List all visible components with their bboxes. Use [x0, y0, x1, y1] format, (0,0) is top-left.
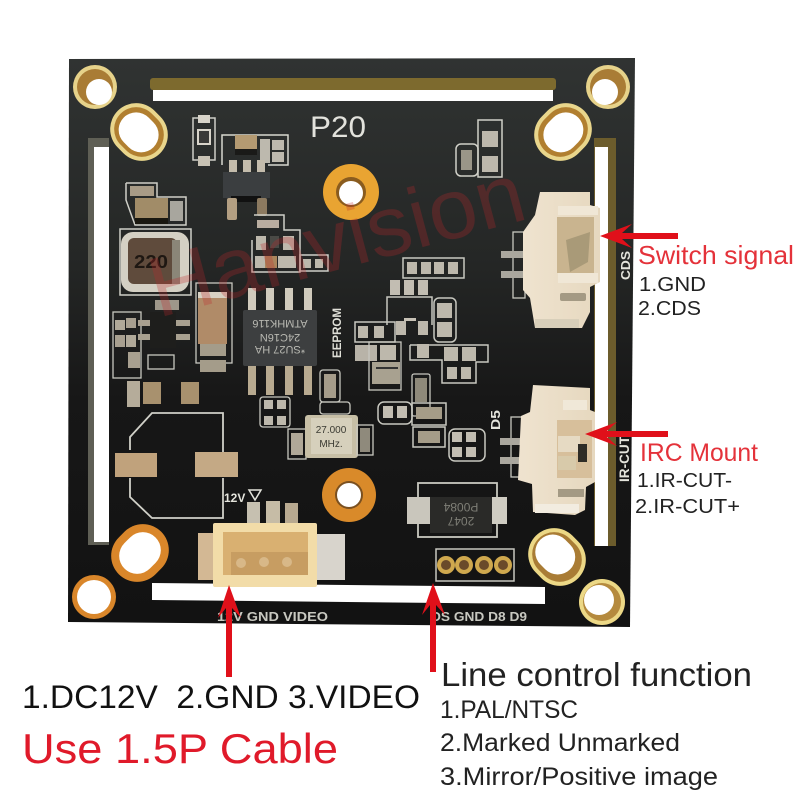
- IRC mount pins: 2.IR-CUT+: [635, 496, 740, 518]
- top slot: [150, 78, 556, 101]
- IRC mount pins: 1.IR-CUT-: [637, 470, 732, 492]
- EEPROM chip: [243, 288, 317, 395]
- chip markings: ATMHK116: [252, 317, 308, 329]
- circuit board: [68, 58, 635, 627]
- line control options: 3.Mirror/Positive image: [440, 763, 718, 791]
- label: switch signal: Switch signal: [638, 240, 794, 270]
- SMD group below chip: [260, 370, 340, 459]
- silkscreen: 12V and pin marker: [224, 490, 261, 505]
- label: line control function: Line control function: [441, 656, 752, 693]
- SMD group upper middle: [252, 215, 328, 272]
- label: IRC mount: [635, 439, 758, 518]
- line control options: 1.PAL/NTSC: [440, 696, 578, 724]
- electrolytic capacitor footprint: [115, 382, 238, 518]
- chip markings: 24C16N: [260, 331, 300, 343]
- silkscreen: 12V and pin marker: 12V: [224, 491, 245, 505]
- crystal 27.000 MHz: MHz.: [319, 439, 343, 450]
- crystal 27.000 MHz: 27.000: [316, 425, 347, 436]
- right slot: [594, 138, 616, 546]
- inductor 220: [120, 229, 191, 295]
- crystal 27.000 MHz: [305, 402, 373, 458]
- silkscreen: P20: P20: [310, 111, 366, 144]
- arrow: line control: [422, 583, 445, 672]
- label: power pinout: 1.DC12V 2.GND 3.VIDEO: [22, 679, 420, 715]
- mounting hole: top centre: [323, 164, 379, 220]
- mounting hole: top left oval: [99, 92, 179, 172]
- mounting hole: bottom centre: [322, 468, 376, 522]
- small diode: [193, 115, 215, 166]
- mounting hole: top right oval: [523, 92, 603, 172]
- line control options: [440, 696, 718, 791]
- silkscreen: header pin labels: DS GND D8 D9: [431, 610, 527, 624]
- watermark: Hanvision: [138, 145, 535, 336]
- line control options: 2.Marked Unmarked: [440, 729, 680, 757]
- inductor 220: 220: [134, 252, 168, 272]
- silkscreen: D5: D5: [488, 410, 503, 430]
- label: cable note: Use 1.5P Cable: [22, 725, 338, 772]
- diode P0084: [407, 483, 507, 537]
- label: switch signal: [638, 240, 794, 320]
- switch signal pins: 1.GND: [639, 274, 706, 296]
- arrow: switch signal: [600, 224, 678, 248]
- capacitor pair above the inductor: [126, 183, 186, 225]
- tall tantalum capacitor: [196, 283, 232, 372]
- arrow: IRC mount: [585, 422, 668, 446]
- diode P0084: P0084: [443, 500, 478, 514]
- centre SMD cluster: [355, 258, 488, 461]
- SOT regulator and capacitor: [222, 135, 288, 220]
- capacitor pads: [115, 452, 238, 477]
- left slot: [88, 138, 109, 545]
- switch signal pins: [638, 274, 706, 320]
- silkscreen: CDS: CDS: [618, 251, 633, 280]
- mounting hole: bottom right small: [579, 579, 625, 625]
- mounting hole: bottom left oval: [100, 513, 180, 593]
- chip markings: [252, 317, 308, 355]
- switch signal pins: 2.CDS: [638, 298, 701, 320]
- silkscreen: IR-CUT: IR-CUT: [616, 436, 632, 482]
- label: IRC mount: IRC Mount: [640, 439, 758, 467]
- arrow: power connector: [218, 585, 241, 677]
- silkscreen: power pin labels: 12V GND VIDEO: [217, 610, 328, 624]
- connector: IRC mount: [500, 385, 595, 515]
- mounting hole: bottom left small: [72, 575, 116, 619]
- connector: power and video: [198, 501, 345, 587]
- label: line control function: [440, 656, 752, 791]
- silkscreen block upper right: [456, 120, 502, 177]
- chip markings: *SU27 HA: [254, 343, 305, 355]
- mounting hole: bottom right oval: [517, 517, 597, 597]
- IRC mount pins: [635, 470, 740, 518]
- diode P0084: 2047: [447, 514, 474, 528]
- bottom slot: [152, 583, 545, 604]
- mounting hole: top right small: [586, 65, 630, 109]
- four pin header: [436, 549, 514, 581]
- connector: CDS switch signal: [501, 192, 600, 328]
- left power circuit group: [113, 300, 190, 407]
- mounting hole: top left small: [73, 65, 117, 109]
- silkscreen: EEPROM: EEPROM: [330, 308, 344, 358]
